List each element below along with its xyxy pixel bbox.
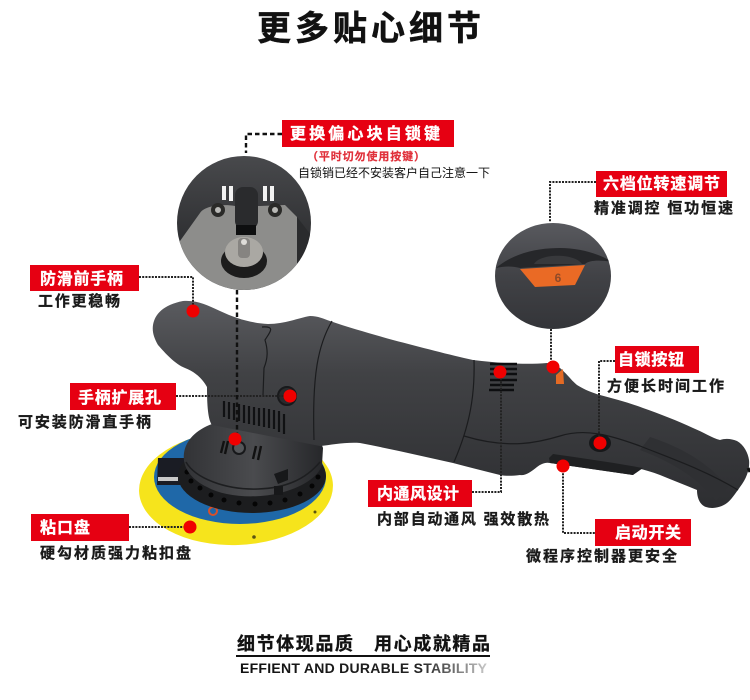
- callout: power switch: [526, 519, 691, 565]
- callout: handle extension hole: 可安装防滑直手柄: [18, 413, 151, 431]
- callout: internal ventilation: [368, 480, 549, 528]
- callout: handle extension hole: [18, 383, 176, 431]
- callout: anti-slip front handle: 防滑前手柄: [40, 269, 123, 288]
- skirt ring highlight: [186, 462, 320, 489]
- orange speed switch: [556, 369, 564, 384]
- callout: lock button: 自锁按钮: [618, 350, 684, 369]
- feet blocks: [274, 469, 288, 495]
- shaft: [235, 187, 258, 229]
- skirt bolt: [233, 442, 245, 454]
- callout: power switch: 微程序控制器更安全: [526, 547, 677, 565]
- power cord: [748, 468, 750, 472]
- callout: internal ventilation: 内部自动通风 强效散热: [377, 510, 549, 528]
- speed number: 6: [555, 271, 562, 285]
- handle grip highlight: [640, 437, 728, 501]
- handle extension hole: [278, 387, 296, 405]
- body seams: [262, 321, 738, 490]
- callout: anti-slip front handle: [30, 265, 139, 310]
- callout: speed adjustment: [594, 171, 733, 217]
- backing pad: [137, 428, 335, 548]
- flange with holes: [178, 439, 326, 513]
- callout: hook and loop pad: [31, 514, 191, 562]
- footer slogan: EFFIENT AND DURABLE STABILITY: [240, 660, 488, 676]
- callout: eccentric block lock key: 自锁销已经不安装客户自己注意一下: [298, 165, 490, 180]
- callout: anti-slip front handle: 工作更稳畅: [38, 292, 120, 310]
- side vents: [224, 401, 284, 434]
- polisher machine: [137, 301, 750, 548]
- callout: speed adjustment: 六档位转速调节: [603, 174, 720, 193]
- callout: eccentric block lock key: [282, 120, 490, 180]
- callout: power switch: 启动开关: [615, 523, 681, 542]
- lock button: [589, 434, 611, 452]
- white bars: [222, 186, 274, 201]
- red markers: [184, 304, 606, 534]
- callout: hook and loop pad: 粘口盘: [40, 518, 90, 537]
- title: 更多贴心细节: [257, 10, 481, 48]
- main body: [153, 301, 749, 508]
- callout: hook and loop pad: 硬勾材质强力粘扣盘: [40, 544, 191, 562]
- air vent slots: [489, 364, 517, 390]
- trigger switch: [549, 454, 643, 475]
- skirt vents: [221, 441, 261, 460]
- callout: speed adjustment: 精准调控 恒功恒速: [594, 199, 733, 217]
- callout: handle extension hole: 手柄扩展孔: [78, 388, 161, 407]
- callout: lock button: [607, 346, 724, 395]
- callout: lock button: 方便长时间工作: [607, 377, 724, 395]
- footer slogan: 细节体现品质 用心成就精品: [237, 633, 490, 654]
- callout: eccentric block lock key: （平时切勿使用按键）: [307, 149, 425, 163]
- detail circle: speed dial: [495, 223, 611, 329]
- nut: [221, 251, 267, 278]
- motor skirt: [184, 420, 323, 496]
- footer slogan: [236, 633, 490, 676]
- callout: internal ventilation: 内通风设计: [377, 485, 459, 503]
- detail circle: eccentric block lock: [177, 156, 311, 290]
- orange speed selector: [520, 265, 585, 287]
- connector lines: [129, 134, 615, 533]
- screws: [213, 205, 280, 215]
- callout: eccentric block lock key: 更换偏心块自锁键: [290, 124, 440, 143]
